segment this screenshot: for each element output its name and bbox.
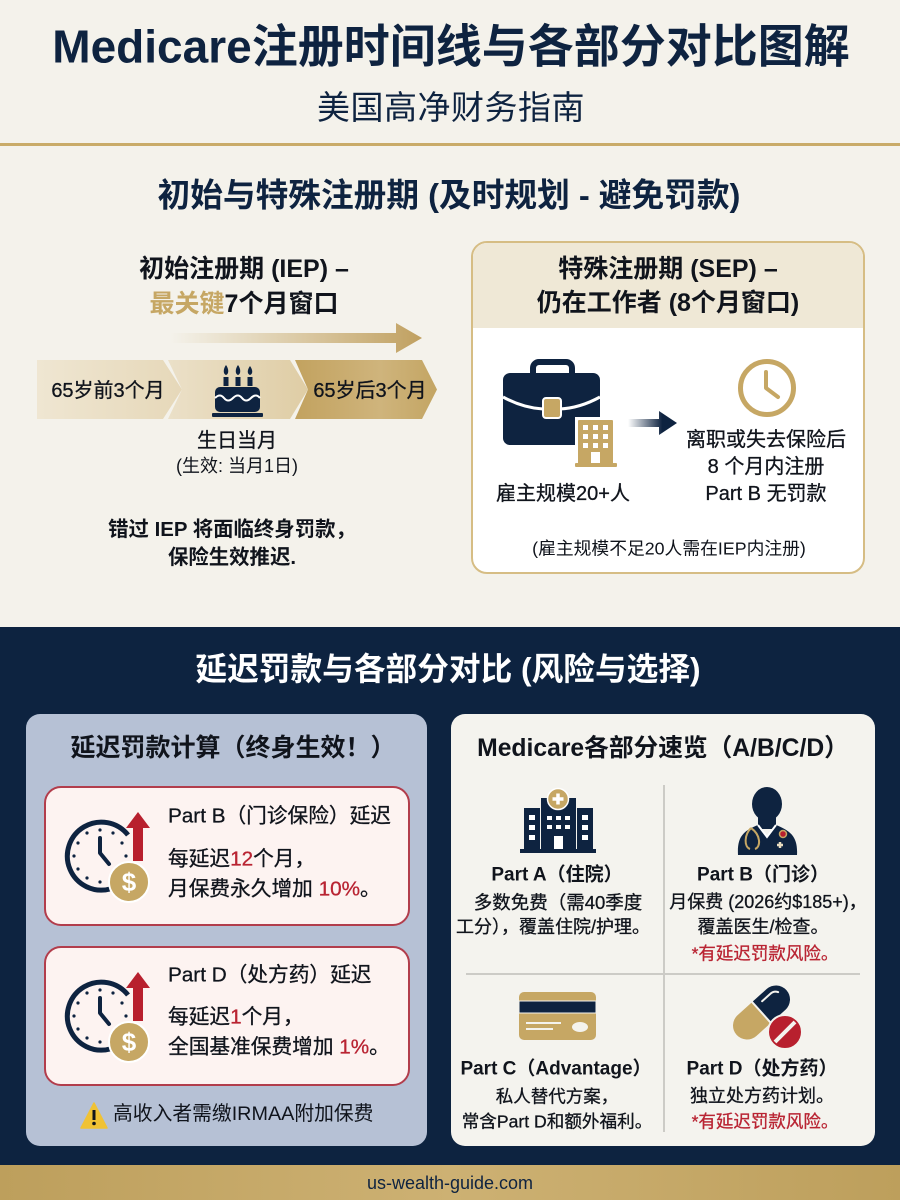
- warning line 1: 错过 IEP 将面临终身罚款，: [108, 519, 356, 541]
- Part D penalty line 2: 全国基准保费增加 1%。: [168, 1036, 390, 1059]
- Part D block: [687, 986, 838, 1132]
- IRMAA note: 高收入者需缴IRMAA附加保费: [113, 1103, 373, 1125]
- arrow: timeline direction: [185, 323, 422, 353]
- label: birthday month: 生日当月: [197, 430, 277, 452]
- card: Part D penalty: [44, 946, 410, 1086]
- Part A line 1: 多数免费（需40季度: [474, 892, 642, 913]
- Part B title: Part B（门诊）: [697, 865, 829, 886]
- Part B block: [669, 787, 867, 964]
- arrow: to SEP result: [629, 411, 677, 435]
- icon: clock and dollar: [64, 812, 150, 903]
- IEP warning text: [108, 518, 356, 569]
- SEP heading line 2: 仍在工作者 (8个月窗口): [537, 289, 799, 317]
- gold divider: [0, 143, 900, 146]
- Part C line 2: 常含Part D和额外福利。: [462, 1111, 652, 1131]
- title: Medicare注册时间线与各部分对比图解: [52, 20, 850, 72]
- label: before 65: 65岁前3个月: [51, 380, 165, 402]
- icon: birthday cake: [212, 365, 263, 417]
- icon: briefcase and building: [503, 359, 617, 467]
- Part B penalty line 2: 月保费永久增加 10%。: [168, 878, 381, 901]
- IEP heading line 1: 初始注册期 (IEP) –: [139, 255, 349, 283]
- card: Part B penalty: [44, 786, 410, 926]
- icon: clock and dollar: $: [122, 1027, 137, 1057]
- SEP result text: [686, 428, 846, 505]
- Part C title: Part C（Advantage）: [460, 1059, 652, 1080]
- section: penalties and comparison: [0, 627, 900, 1165]
- result line 3: Part B 无罚款: [705, 483, 827, 505]
- label: effective date: (生效: 当月1日): [176, 456, 298, 476]
- IEP heading line 2: 最关键7个月窗口: [150, 290, 338, 318]
- IEP heading: [139, 255, 349, 318]
- section heading: enrollment periods: 初始与特殊注册期 (及时规划 - 避免罚款): [158, 176, 740, 213]
- icon: hospital: [520, 788, 596, 853]
- icon: gold clock: [738, 359, 796, 417]
- footer band: [0, 1165, 900, 1200]
- panel: Medicare parts overview: [451, 714, 875, 1146]
- Part A line 2: 工分），覆盖住院/护理。: [456, 917, 650, 937]
- icon: warning triangle: [80, 1102, 108, 1129]
- SEP heading line 1: 特殊注册期 (SEP) –: [558, 255, 778, 283]
- icon: pills: [733, 986, 801, 1048]
- Part D line 1: 独立处方药计划。: [690, 1086, 834, 1106]
- Part C line 1: 私人替代方案，: [496, 1086, 618, 1106]
- label: employer size: 雇主规模20+人: [496, 483, 630, 505]
- Part B line 1: 月保费 (2026约$185+)，: [669, 892, 867, 912]
- result line 2: 8 个月内注册: [708, 456, 824, 478]
- label: after 65: 65岁后3个月: [313, 380, 427, 402]
- overview heading: Medicare各部分速览（A/B/C/D）: [477, 735, 849, 762]
- panel: initial enrollment period: [37, 255, 437, 569]
- Part B risk note: *有延迟罚款风险。: [692, 944, 838, 964]
- timeline chevrons: [37, 360, 437, 419]
- icon: doctor: [738, 787, 798, 855]
- Part D risk note: *有延迟罚款风险。: [692, 1112, 838, 1132]
- footer website: us-wealth-guide.com: [367, 1173, 533, 1193]
- Part C block: [460, 992, 652, 1131]
- header: [0, 20, 900, 146]
- subtitle: 美国高净财务指南: [317, 89, 585, 126]
- Part D penalty title: Part D（处方药）延迟: [168, 964, 371, 987]
- Part B line 2: 覆盖医生/检查。: [697, 917, 829, 937]
- Part D penalty line 1: 每延迟1个月，: [168, 1006, 304, 1029]
- Part B penalty line 1: 每延迟12个月，: [168, 848, 315, 871]
- penalty panel heading: 延迟罚款计算（终身生效！）: [70, 734, 396, 762]
- icon: clock and dollar: [64, 972, 150, 1063]
- Part A title: Part A（住院）: [491, 865, 623, 886]
- section heading: penalties and comparison: 延迟罚款与各部分对比 (风险与选择): [195, 651, 701, 687]
- SEP footnote: (雇主规模不足20人需在IEP内注册): [532, 538, 806, 558]
- SEP header band: [473, 243, 863, 328]
- icon: credit card: [519, 992, 596, 1040]
- panel: late penalty calculation: [26, 714, 427, 1146]
- Part A block: [456, 788, 650, 937]
- result line 1: 离职或失去保险后: [686, 429, 846, 451]
- Part B penalty title: Part B（门诊保险）延迟: [168, 805, 391, 828]
- icon: clock and dollar: $: [122, 867, 137, 897]
- warning line 2: 保险生效推迟.: [168, 547, 296, 569]
- panel: special enrollment period: [471, 241, 865, 574]
- Part D title: Part D（处方药）: [687, 1059, 837, 1080]
